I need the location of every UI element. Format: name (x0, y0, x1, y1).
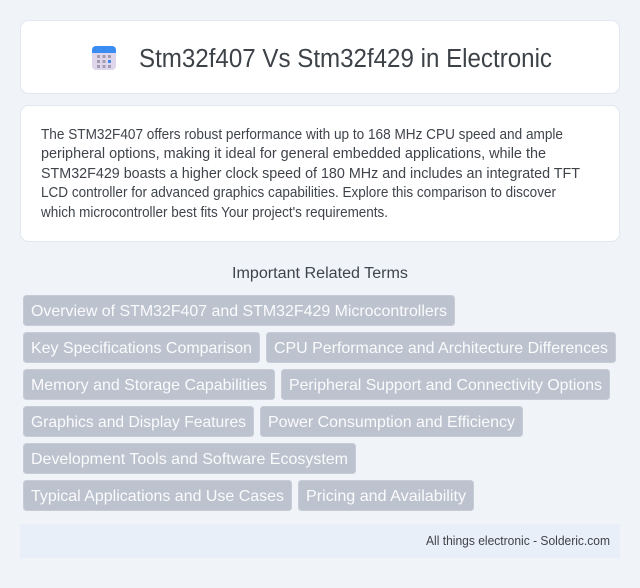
tag: pricing: Pricing and Availability (306, 488, 466, 505)
tag: key specifications: Key Specifications Comparison (31, 340, 252, 357)
description text: LCD controller for advanced graphics capabilities. Explore this comparison to discover (41, 185, 556, 201)
tag: peripheral (282, 370, 610, 400)
tag list (24, 296, 616, 510)
tag: applications: Typical Applications and Use Cases (31, 488, 284, 505)
tag: applications (24, 480, 292, 510)
description text: which microcontroller best fits Your project's requirements. (40, 205, 388, 221)
footer: All things electronic - Solderic.com (426, 534, 610, 548)
tag: development tools (24, 444, 356, 474)
tag: overview (24, 296, 454, 326)
tag: cpu performance: CPU Performance and Architecture Differences (274, 340, 608, 357)
tag: memory (24, 370, 274, 400)
heading: important related terms: Important Related Terms (232, 265, 408, 282)
tag: peripheral: Peripheral Support and Connectivity Options (289, 377, 602, 394)
tag: key specifications (24, 332, 260, 362)
tag: cpu performance (266, 332, 616, 362)
tag: power: Power Consumption and Efficiency (268, 414, 515, 431)
tag: development tools: Development Tools and Software Ecosystem (31, 451, 348, 468)
title: Stm32f407 Vs Stm32f429 in Electronic (139, 45, 552, 73)
header panel (20, 20, 620, 94)
tag: pricing (298, 480, 474, 510)
tag: power (260, 406, 522, 436)
tag: memory: Memory and Storage Capabilities (31, 377, 267, 394)
description text: STM32F429 boasts a higher clock speed of 180 MHz and includes an integrated TFT (41, 166, 580, 182)
icon: calendar (92, 46, 116, 70)
footer (20, 524, 620, 558)
panel: description (20, 106, 620, 242)
tag: graphics (24, 406, 254, 436)
description text (40, 127, 580, 221)
description text: The STM32F407 offers robust performance with up to 168 MHz CPU speed and ample (41, 127, 563, 143)
tag: graphics: Graphics and Display Features (31, 414, 246, 431)
tag: overview: Overview of STM32F407 and STM32F429 Microcontrollers (31, 303, 447, 320)
description text: peripheral options, making it ideal for general embedded applications, while the (41, 146, 546, 162)
